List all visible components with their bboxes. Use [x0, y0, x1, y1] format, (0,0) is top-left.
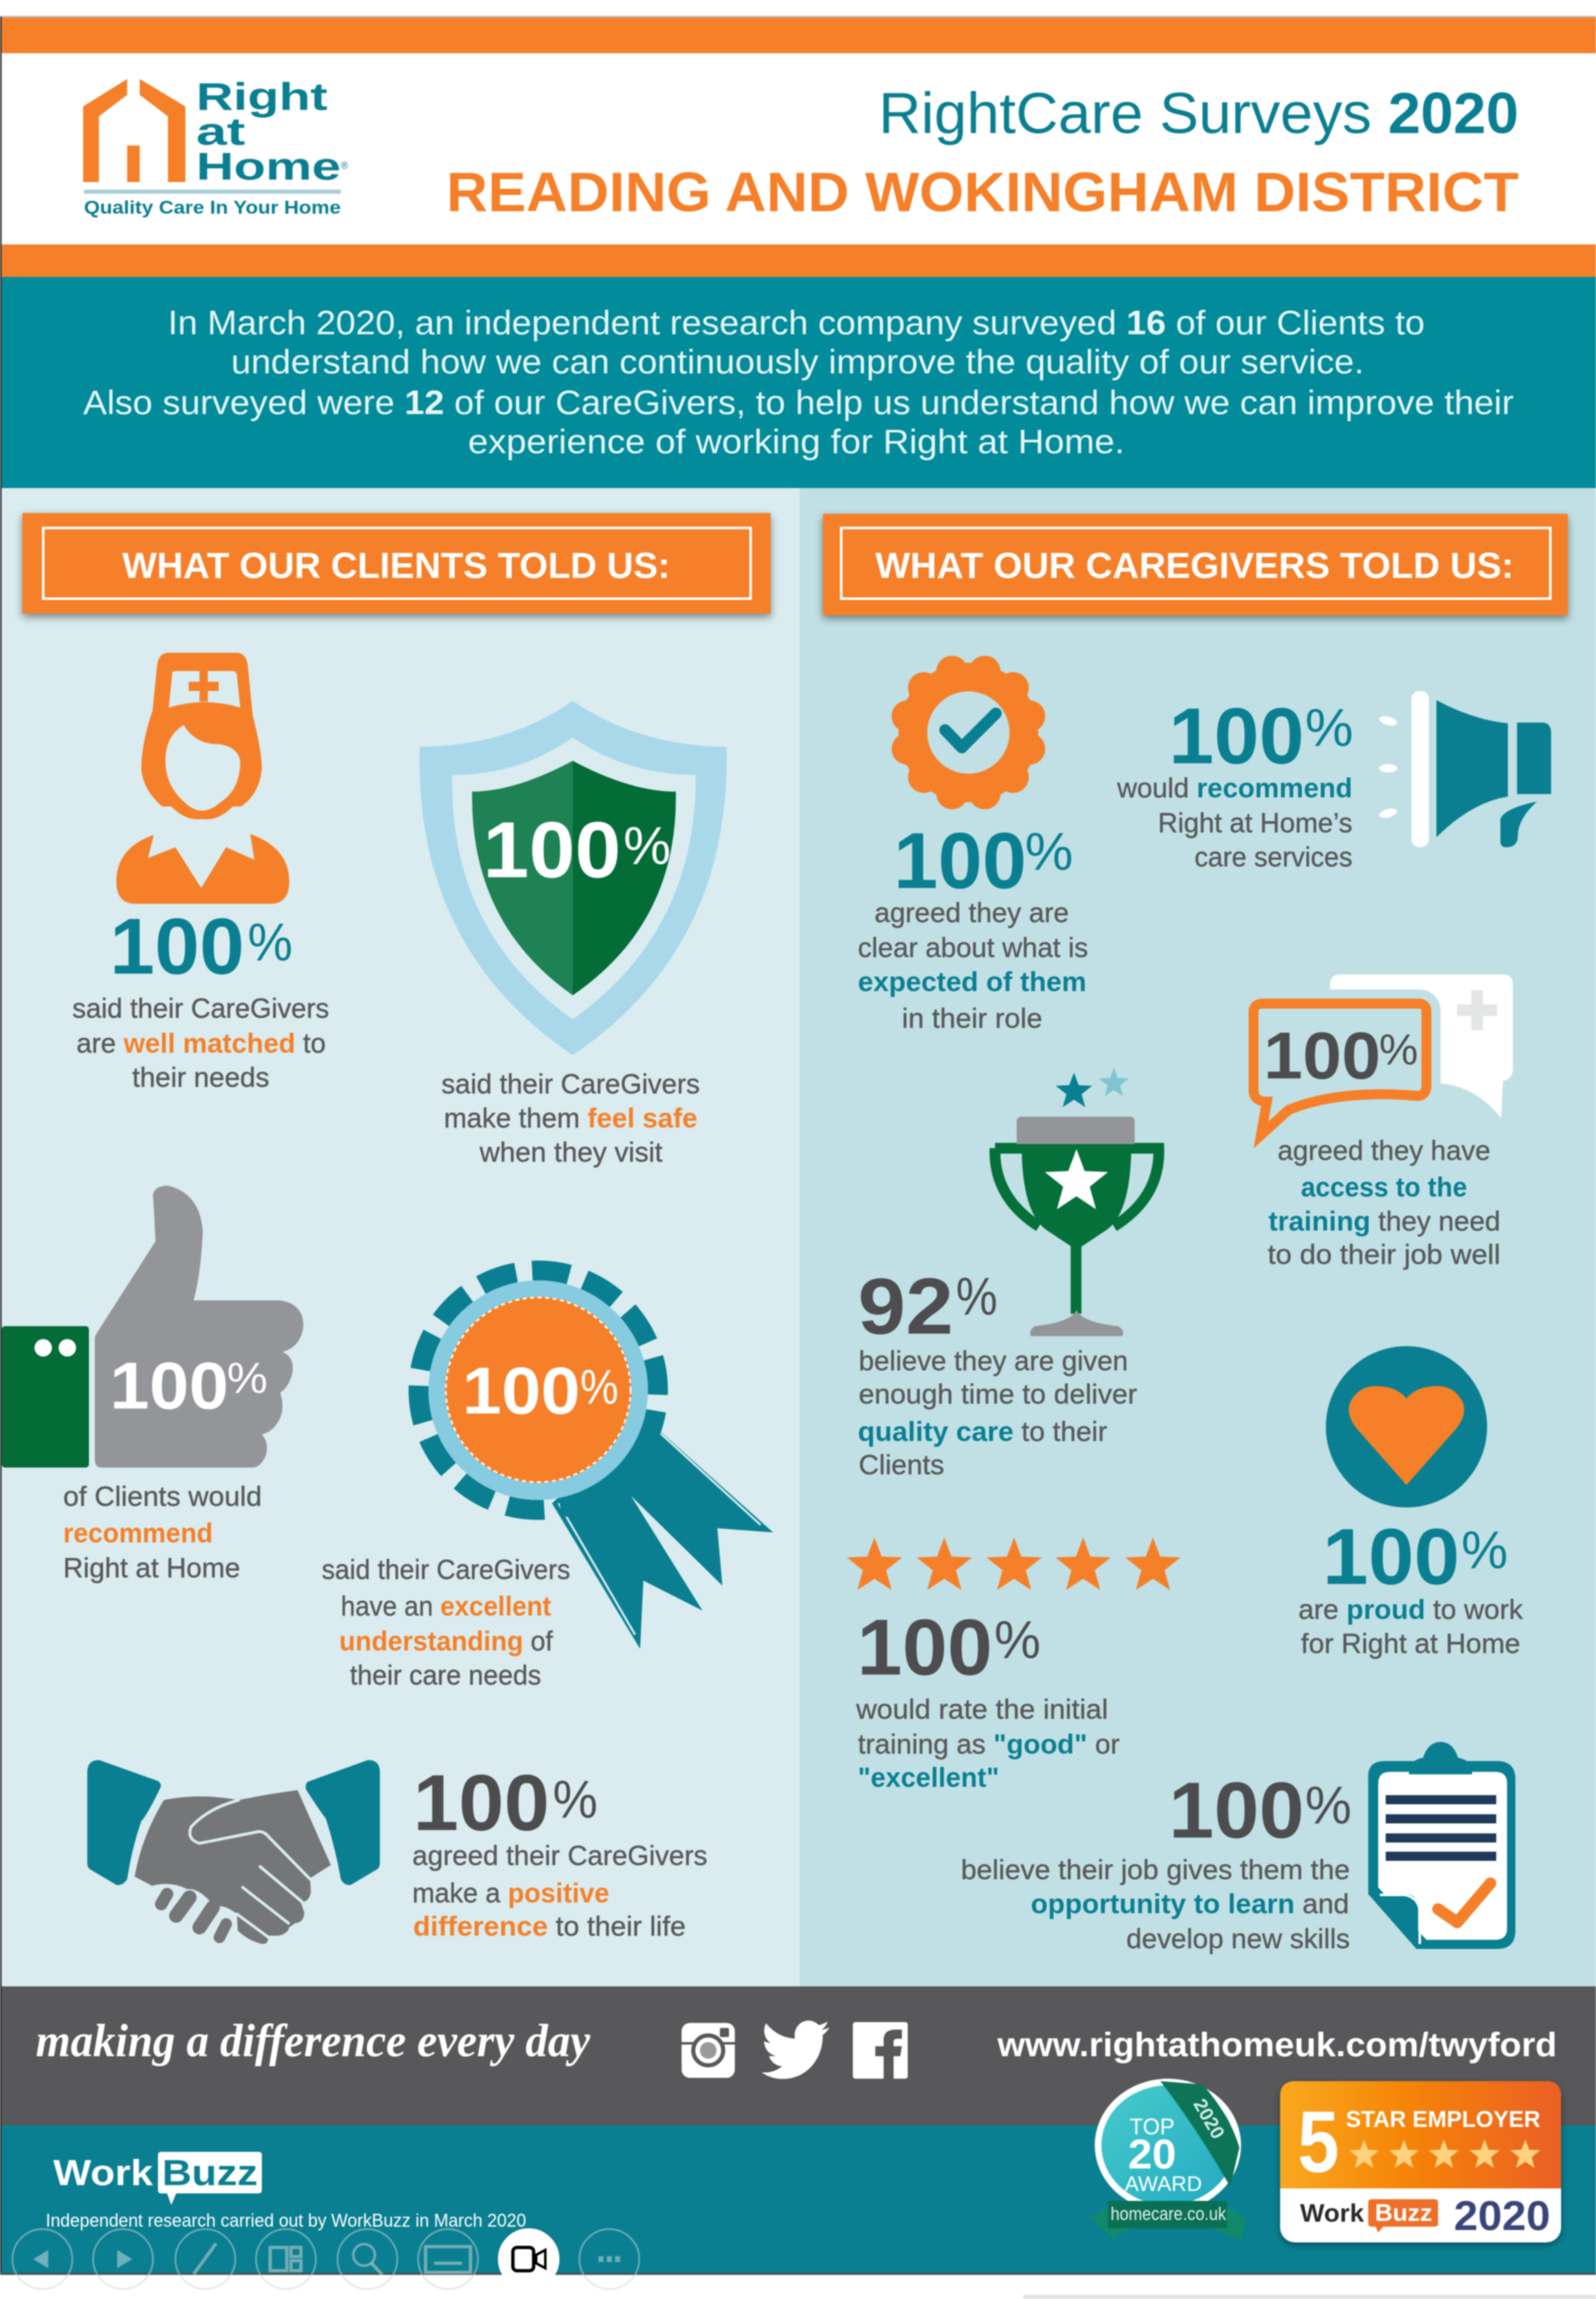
stat: feel safe: % [623, 816, 671, 876]
stat: quality care: 92 [858, 1262, 953, 1351]
stat: access to training: to do their job well [1268, 1239, 1500, 1270]
stat: access to training: 100 [1264, 1019, 1381, 1093]
stat: well matched: % [248, 912, 293, 972]
icon: instagram [682, 2023, 735, 2078]
stat: excellent understanding: have an excellent [341, 1591, 551, 1621]
icon: shield [420, 701, 727, 1055]
panel: intro: Also surveyed were 12 of our CareGivers, to help us understand how we can improve their [83, 383, 1514, 422]
stat: excellent understanding: their care needs [350, 1660, 541, 1690]
stat: quality care: believe they are given [859, 1345, 1128, 1376]
stat: expected of them: in their role [902, 1003, 1042, 1034]
stat: quality care: quality care to their [858, 1416, 1107, 1447]
icon: check badge [892, 656, 1045, 809]
stat: excellent understanding [322, 1265, 773, 1690]
stat: initial training: would rate the initial [855, 1694, 1108, 1724]
stat: expected of them: clear about what is [858, 932, 1088, 963]
stat: would recommend: 100 [1169, 692, 1304, 781]
stat: excellent understanding: % [580, 1360, 618, 1414]
logo: Right at Home: Home [196, 145, 341, 188]
logo: Right at Home: Quality Care In Your Home [84, 197, 341, 218]
stat: initial training: "excellent" [858, 1762, 999, 1793]
stat: would recommend: % [1305, 698, 1353, 757]
stat: positive difference: make a positive [412, 1877, 609, 1908]
stat: recommend: of Clients would [63, 1481, 262, 1512]
award: top 20: TOP [1130, 2114, 1175, 2139]
stat: positive difference: agreed their CareGivers [412, 1840, 707, 1871]
stat: well matched: are well matched to [76, 1028, 326, 1058]
award: 5 star employer [1280, 2081, 1561, 2242]
award: top 20: homecare.co.uk [1111, 2203, 1227, 2224]
stat: expected of them: agreed they are [874, 897, 1069, 928]
icon: heart [1326, 1346, 1487, 1507]
stat: quality care: % [956, 1266, 998, 1326]
panel: intro [0, 277, 1596, 488]
icon: rosette [412, 1265, 773, 1649]
stat: well matched [72, 653, 329, 1093]
stat: would recommend: would recommend [1116, 772, 1352, 803]
stat: would recommend: care services [1195, 841, 1352, 872]
stat: recommend: recommend [63, 1517, 213, 1548]
stat: access to training [1254, 974, 1513, 1270]
award: top 20: AWARD [1125, 2173, 1202, 2196]
panel: footer strip [0, 1986, 1596, 2125]
logo: WorkBuzz: Buzz [162, 2153, 258, 2193]
stat: would recommend: Right at Home’s [1158, 807, 1352, 838]
stat: opportunity to learn: % [1305, 1775, 1352, 1835]
award: top 20: 20 [1128, 2131, 1176, 2178]
stat: expected of them: 100 [894, 816, 1027, 905]
logo: Right at Home: at [196, 110, 245, 153]
award: 5 star employer: STAR EMPLOYER [1346, 2106, 1540, 2132]
stat: proud: % [1461, 1520, 1508, 1580]
logo: WorkBuzz [53, 2152, 262, 2205]
toolbar: slide controls [12, 2229, 639, 2289]
heading: clients: WHAT OUR CLIENTS TOLD US: [122, 545, 670, 586]
stat: proud [1298, 1346, 1523, 1659]
heading: caregivers [823, 514, 1568, 615]
logo: Right at Home: Right [196, 75, 328, 118]
icon: megaphone [1378, 691, 1551, 847]
stat: proud: for Right at Home [1301, 1628, 1520, 1659]
panel: caregivers [800, 488, 1596, 1986]
stat: feel safe: 100 [483, 806, 621, 895]
stat: positive difference: % [553, 1769, 598, 1829]
stat: expected of them: % [1025, 821, 1073, 881]
icon: facebook [853, 2022, 908, 2079]
award: 5 star employer: 2020 [1454, 2193, 1550, 2239]
icon: five stars [847, 1537, 1180, 1590]
stat: opportunity to learn: develop new skills [1126, 1923, 1350, 1954]
stat: access to training: % [1379, 1026, 1418, 1074]
icon: trophy [995, 1068, 1159, 1336]
stat: initial training [847, 1537, 1180, 1793]
stat: feel safe: said their CareGivers [441, 1068, 700, 1099]
icon: twitter [761, 2020, 830, 2079]
stat: initial training: % [994, 1610, 1041, 1670]
icon: clipboard [1368, 1742, 1515, 1949]
stat: would recommend [1116, 691, 1551, 872]
stat: quality care: Clients [859, 1449, 944, 1480]
logo: Right at Home: ® [341, 160, 348, 171]
stat: quality care [858, 1068, 1159, 1480]
logo: WorkBuzz: Work [53, 2153, 154, 2193]
stat: opportunity to learn: believe their job gives them the [961, 1854, 1350, 1885]
stat: feel safe [420, 701, 727, 1167]
panel: bottom band [0, 2081, 1596, 2289]
stat: access to training: training they need [1268, 1206, 1500, 1236]
stat: expected of them: expected of them [858, 966, 1086, 997]
stat: recommend: 100 [110, 1349, 229, 1423]
stat: initial training: 100 [857, 1603, 993, 1692]
stat: proud: 100 [1323, 1512, 1460, 1601]
icon: thumbs up [2, 1186, 303, 1468]
award: 5 star employer: Work [1300, 2198, 1365, 2227]
icon: handshake [87, 1760, 380, 1944]
stat: recommend: % [227, 1354, 268, 1403]
stat: positive difference: difference to their life [413, 1911, 686, 1941]
stat: well matched: 100 [110, 902, 244, 991]
stat: well matched: said their CareGivers [72, 993, 329, 1024]
stat: positive difference [87, 1759, 707, 1944]
stat: positive difference: 100 [413, 1759, 549, 1848]
panel: intro: experience of working for Right at Home. [468, 422, 1125, 461]
stat: initial training: training as "good" or [858, 1729, 1120, 1759]
stat: excellent understanding: 100 [462, 1354, 580, 1428]
heading: clients [22, 513, 771, 614]
stat: quality care: enough time to deliver [859, 1379, 1137, 1409]
website url: www.rightathomeuk.com/twyford [997, 2025, 1557, 2064]
stat: feel safe: make them feel safe [444, 1103, 697, 1133]
stat: recommend [2, 1186, 303, 1583]
stat: excellent understanding: understanding of [339, 1626, 554, 1656]
icon: nurse [116, 653, 289, 904]
title: RightCare Surveys 2020 [879, 81, 1519, 146]
heading: caregivers: WHAT OUR CAREGIVERS TOLD US: [875, 545, 1514, 586]
panel: header [0, 16, 1596, 277]
stat: well matched: their needs [132, 1062, 269, 1093]
stat: expected of them [858, 656, 1088, 1034]
subtitle: READING AND WOKINGHAM DISTRICT [446, 161, 1519, 224]
stat: opportunity to learn: 100 [1169, 1766, 1304, 1855]
award: top 20: 2020 [1190, 2095, 1229, 2143]
stat: proud: are proud to work [1298, 1594, 1523, 1625]
logo: Right at Home [83, 75, 348, 218]
icon: speech bubbles [1254, 974, 1513, 1135]
panel: intro: understand how we can continuously improve the quality of our service. [231, 343, 1364, 381]
research note: Independent research carried out by WorkBuzz in March 2020 [46, 2210, 526, 2231]
stat: access to training: access to the [1301, 1172, 1467, 1202]
stat: opportunity to learn: opportunity to learn and [1031, 1888, 1349, 1919]
stat: opportunity to learn [961, 1742, 1515, 1954]
stat: recommend: Right at Home [63, 1552, 240, 1583]
award: top 20 [1090, 2081, 1246, 2241]
award: 5 star employer: 5 [1298, 2094, 1339, 2191]
award: 5 star employer: Buzz [1375, 2200, 1432, 2227]
panel: clients [0, 488, 800, 1986]
stat: excellent understanding: said their CareGivers [322, 1554, 570, 1585]
tagline: making a difference every day [36, 2015, 591, 2067]
stat: access to training: agreed they have [1278, 1135, 1490, 1166]
stat: feel safe: when they visit [479, 1137, 663, 1167]
panel: intro: In March 2020, an independent research company surveyed 16 of our Clients to [168, 303, 1425, 342]
